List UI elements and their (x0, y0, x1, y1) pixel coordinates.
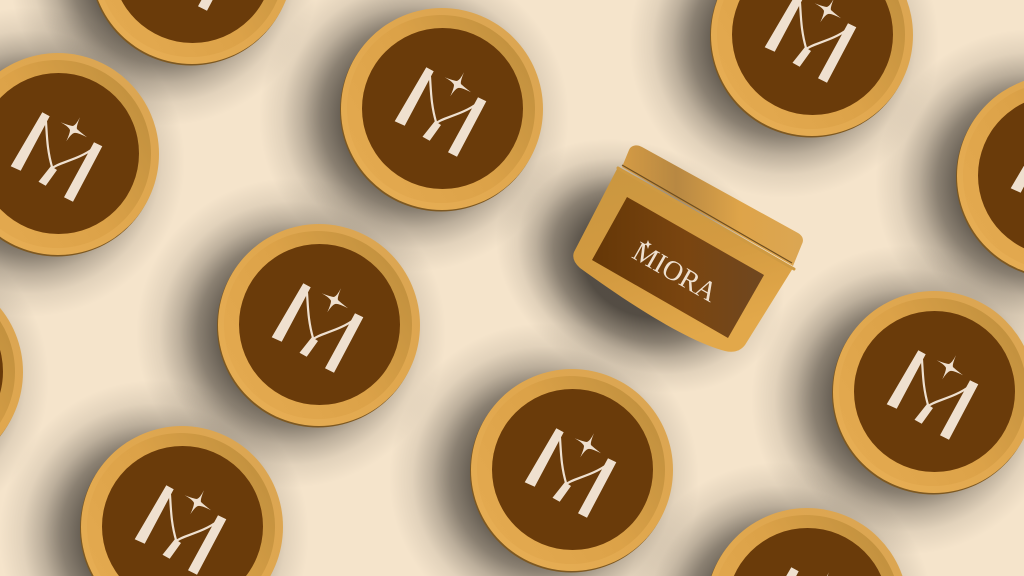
wordmark: MIORA (627, 236, 723, 309)
jar body (573, 167, 793, 352)
tin lid: lower right (832, 291, 1024, 494)
lid groove (622, 165, 792, 263)
jar label (592, 197, 764, 338)
tin lid: top left (90, 0, 293, 66)
tin lid: far right (956, 75, 1024, 278)
tin lid: bottom right (705, 508, 908, 576)
tin lid: top centre (340, 8, 543, 212)
upright jar with label (573, 145, 803, 352)
tin lid: bottom centre (470, 369, 673, 572)
jar lid (622, 145, 803, 266)
tin lid: upper left (0, 53, 159, 256)
tin lid: bottom left (80, 426, 283, 576)
tin lid: top right (710, 0, 913, 138)
tin lid: left edge (0, 271, 23, 474)
tin lid: centre left (217, 224, 420, 428)
wordmark star (644, 240, 652, 249)
lid rim (618, 168, 794, 269)
